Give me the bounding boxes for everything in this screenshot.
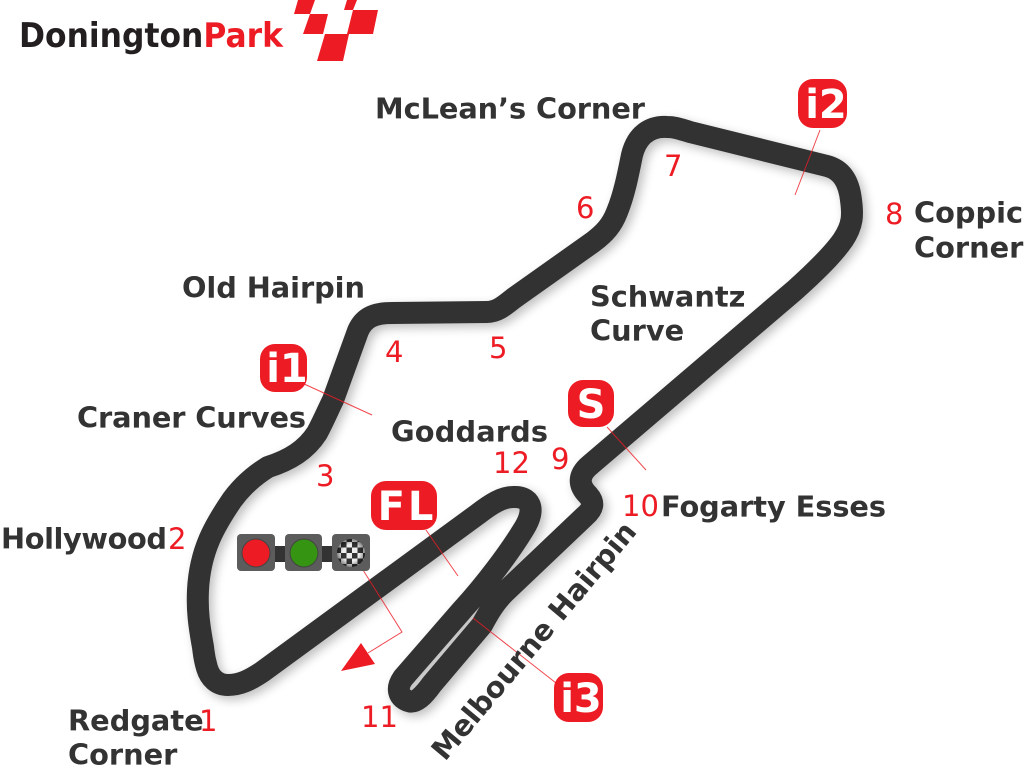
corner numbers: 12 (493, 446, 530, 480)
badge: i3: i3 (560, 676, 602, 722)
corner numbers: 9 (551, 442, 569, 476)
corner name labels: Craner Curves (77, 400, 306, 434)
corner numbers: 3 (316, 459, 334, 493)
logo: Donington Park (19, 0, 378, 61)
corner name labels: Corner (914, 230, 1024, 264)
badge: FL: FL (378, 484, 436, 530)
corner numbers: 6 (576, 191, 594, 225)
logo flag (294, 0, 378, 61)
callout leader lines (302, 130, 820, 683)
badge: i2: i2 (805, 82, 847, 128)
corner name labels: Curve (590, 314, 684, 348)
logo wordmark: DoningtonPark (19, 16, 284, 56)
green light (285, 534, 322, 571)
badge: S (568, 380, 614, 428)
corner name labels: Schwantz (590, 280, 745, 314)
red light (237, 534, 275, 571)
corner name labels: McLean’s Corner (375, 92, 646, 126)
corner name labels: Hollywood (1, 522, 167, 556)
corner numbers: 5 (489, 331, 507, 365)
corner numbers: 7 (664, 149, 682, 183)
badge: S: S (577, 382, 605, 428)
corner numbers: 4 (385, 335, 403, 369)
corner numbers: 11 (361, 700, 398, 734)
corner name labels: Corner (68, 738, 178, 772)
start direction arrow (341, 643, 375, 671)
corner name labels: Redgate (68, 704, 204, 738)
badge: i1: i1 (266, 346, 308, 392)
corner name labels: Melbourne Hairpin (424, 515, 643, 766)
circuit track (198, 127, 852, 702)
corner numbers: 2 (168, 522, 186, 556)
corner numbers: 10 (622, 489, 659, 523)
corner numbers (168, 149, 903, 738)
corner numbers: 8 (885, 197, 903, 231)
start lights and chequered flag (237, 534, 370, 571)
corner name labels: Fogarty Esses (661, 490, 886, 524)
corner name labels: Goddards (391, 414, 548, 448)
corner numbers: 1 (199, 704, 217, 738)
corner name labels: Old Hairpin (182, 270, 365, 304)
chequered flag (332, 534, 370, 571)
